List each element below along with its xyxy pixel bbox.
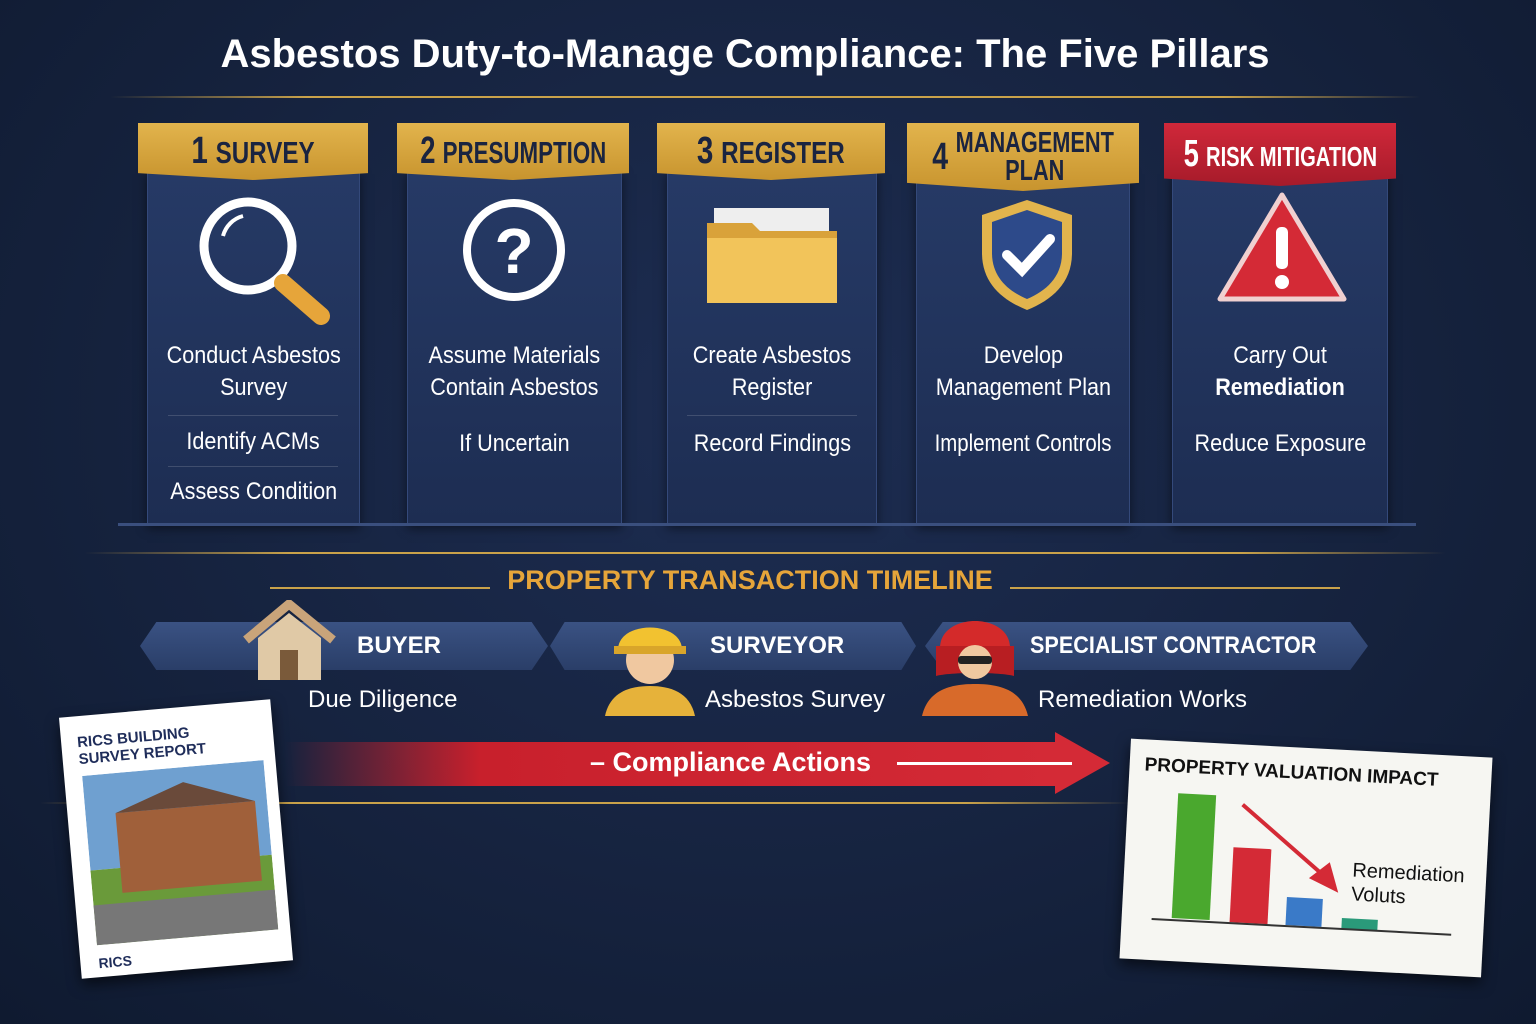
timeline heading: PROPERTY TRANSACTION TIMELINE	[507, 565, 993, 595]
timeline: surveyor	[550, 622, 916, 716]
RICS report	[59, 699, 293, 979]
banner 5	[1164, 123, 1396, 186]
pillar 2	[397, 123, 629, 532]
chart: property valuation impact: Remediation	[1352, 859, 1465, 887]
text: Survey	[220, 374, 287, 401]
pillar 4: Implement Controls	[935, 430, 1111, 457]
text: Create Asbestos	[693, 342, 851, 369]
banner 2: 2PRESUMPTION	[420, 130, 606, 172]
icon: surveyor	[605, 628, 695, 716]
timeline: buyer: BUYER	[357, 632, 441, 659]
pillar 3: Record Findings	[693, 430, 851, 457]
text: Register	[732, 374, 812, 401]
timeline: buyer	[140, 600, 548, 713]
banner 3	[657, 123, 885, 180]
chart: property valuation impact: Voluts	[1351, 883, 1406, 908]
banner 3: 3 REGISTER	[697, 130, 845, 172]
pillar 5: Reduce Exposure	[1194, 430, 1366, 457]
banner 4: 4	[932, 136, 948, 178]
timeline: specialist contractor	[922, 621, 1368, 716]
chart: property valuation impact	[1119, 739, 1493, 977]
text: Management Plan	[935, 374, 1111, 401]
banner 5: 5 RISK MITIGATION	[1183, 133, 1377, 175]
icon: question: ?	[494, 215, 534, 287]
text: Conduct Asbestos	[166, 342, 341, 369]
text	[166, 342, 341, 401]
banner 4	[907, 123, 1139, 191]
text: Remediation	[1215, 374, 1345, 401]
icon: warning	[1218, 192, 1346, 302]
pillar 1: Identify ACMs	[187, 428, 320, 455]
RICS report: RICS BUILDING	[76, 724, 190, 751]
pillar 5	[1164, 123, 1396, 532]
text	[693, 342, 851, 401]
icon: shield	[982, 200, 1072, 310]
banner 1: 1 SURVEY	[191, 130, 315, 172]
pillar 2: If Uncertain	[459, 430, 570, 457]
arrow: compliance actions: – Compliance Actions	[590, 747, 871, 777]
pillar 1: Assess Condition	[170, 478, 337, 505]
timeline: surveyor: SURVEYOR	[710, 632, 844, 659]
pillar 3	[657, 123, 885, 532]
timeline: buyer: Due Diligence	[308, 686, 457, 713]
text	[428, 342, 600, 401]
pillar 1	[138, 123, 368, 532]
icon: folder	[707, 208, 837, 303]
RICS report: SURVEY REPORT	[78, 740, 207, 768]
icon: house	[243, 600, 336, 680]
text	[935, 342, 1111, 401]
text	[1215, 342, 1345, 401]
chart: property valuation impact: PROPERTY VALUATION IMPACT	[1144, 754, 1439, 791]
arrow: compliance actions	[294, 732, 1110, 794]
banner 2	[397, 123, 629, 180]
text: Assume Materials	[429, 342, 600, 369]
text: Contain Asbestos	[430, 374, 599, 401]
banner 4: MANAGEMENT	[956, 127, 1114, 159]
timeline: specialist contractor: SPECIALIST CONTRACTOR	[1030, 632, 1316, 659]
timeline: surveyor: Asbestos Survey	[705, 686, 885, 713]
pillar 4	[907, 123, 1139, 532]
banner 4: PLAN	[1005, 155, 1064, 187]
icon: magnifier	[200, 198, 330, 325]
icon: contractor	[922, 621, 1028, 716]
timeline: specialist contractor: Remediation Works	[1038, 686, 1247, 713]
icon: question	[463, 199, 565, 301]
banner 1	[138, 123, 368, 180]
text: Carry Out	[1233, 342, 1327, 369]
text: Develop	[983, 342, 1063, 369]
RICS report: RICS	[98, 952, 133, 971]
title: Asbestos Duty-to-Manage Compliance: The Five Pillars	[220, 32, 1270, 76]
